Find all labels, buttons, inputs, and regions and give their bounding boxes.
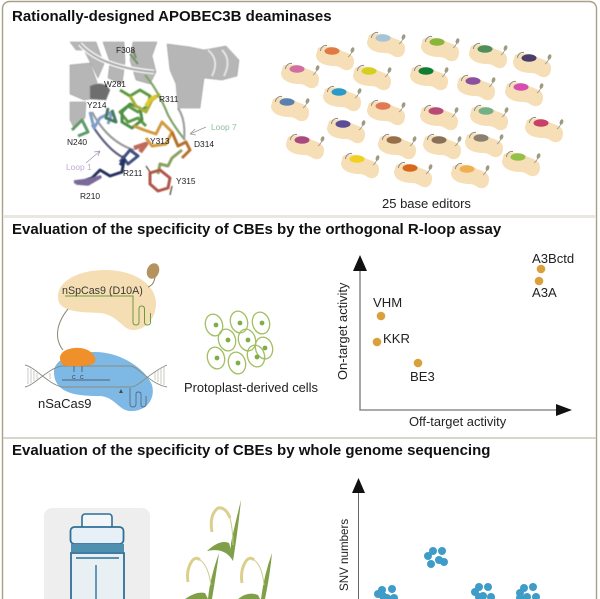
residue labels: N240 — [67, 137, 87, 147]
divider bars — [3, 215, 596, 439]
axes — [353, 255, 572, 416]
residue labels: R211 — [123, 168, 143, 178]
nSpCas9 label: nSpCas9 (D10A) — [62, 285, 143, 297]
heading: panel 1: Rationally-designed APOBEC3B deaminases — [12, 8, 332, 25]
linker — [58, 309, 68, 350]
panel: whole genome sequencing — [12, 442, 540, 599]
base edit marks: C — [80, 375, 84, 381]
loops — [80, 44, 185, 158]
loop arrows — [86, 127, 206, 163]
point labels: KKR — [383, 331, 410, 346]
residue labels — [66, 45, 237, 201]
nSaCas9 label: nSaCas9 — [38, 396, 91, 411]
rice plants — [185, 500, 272, 599]
residue labels: Loop 1 — [66, 162, 92, 172]
helix highlights — [80, 44, 228, 76]
residue labels: Loop 7 — [211, 122, 237, 132]
x axis title: Off-target activity — [409, 414, 507, 429]
y axis title: SNV numbers — [338, 519, 351, 591]
y axis with arrow — [352, 478, 365, 599]
effector head — [145, 261, 161, 287]
base edit marks — [72, 375, 123, 393]
assay diagram — [25, 261, 167, 411]
residue labels: D314 — [194, 139, 214, 149]
sequencing reagent bottle — [44, 508, 150, 599]
protoplast cells — [203, 309, 275, 376]
scatter chart: SNV numbers — [338, 478, 540, 599]
residue labels: Y315 — [176, 176, 196, 186]
guide RNA green — [65, 296, 150, 325]
caption: 25 base editors: 25 base editors — [382, 196, 471, 211]
base edit marks: C — [72, 375, 76, 381]
base editors group — [271, 32, 564, 188]
residue labels: R311 — [159, 94, 179, 104]
residue labels: F308 — [116, 45, 135, 55]
residue labels: Y313 — [150, 136, 170, 146]
leaves — [185, 500, 272, 599]
data points — [373, 265, 545, 367]
heading: panel 3: Evaluation of the specificity of CBEs by whole genome sequencing — [12, 442, 490, 459]
scatter chart: on-target vs off-target — [335, 251, 574, 429]
caption: protoplast cells: Protoplast-derived cells — [184, 380, 318, 395]
gray ribbons — [70, 42, 239, 128]
residue labels: R210 — [80, 191, 100, 201]
point labels: A3A — [532, 285, 557, 300]
DNA — [25, 365, 167, 407]
point labels: BE3 — [410, 369, 435, 384]
colored side chains — [72, 50, 190, 195]
panicles — [188, 508, 254, 583]
point labels: VHM — [373, 295, 402, 310]
deaminase orange — [60, 348, 95, 366]
protein structure — [66, 42, 239, 201]
data clusters — [374, 547, 540, 599]
heading: panel 2: Evaluation of the specificity of CBEs by the orthogonal R-loop assay — [12, 221, 502, 238]
residue labels: W281 — [104, 79, 126, 89]
y axis title: On-target activity — [335, 282, 350, 380]
artwork: ribbons and side chains — [70, 42, 239, 195]
point labels: A3Bctd — [532, 251, 574, 266]
panel: rationally designed deaminases — [12, 8, 564, 211]
residue labels: Y214 — [87, 100, 107, 110]
panicle stems — [200, 518, 264, 585]
nSaCas9 body — [54, 352, 153, 411]
point labels — [373, 251, 574, 384]
panel: orthogonal R-loop assay — [12, 221, 574, 429]
nSpCas9 body — [58, 270, 156, 330]
